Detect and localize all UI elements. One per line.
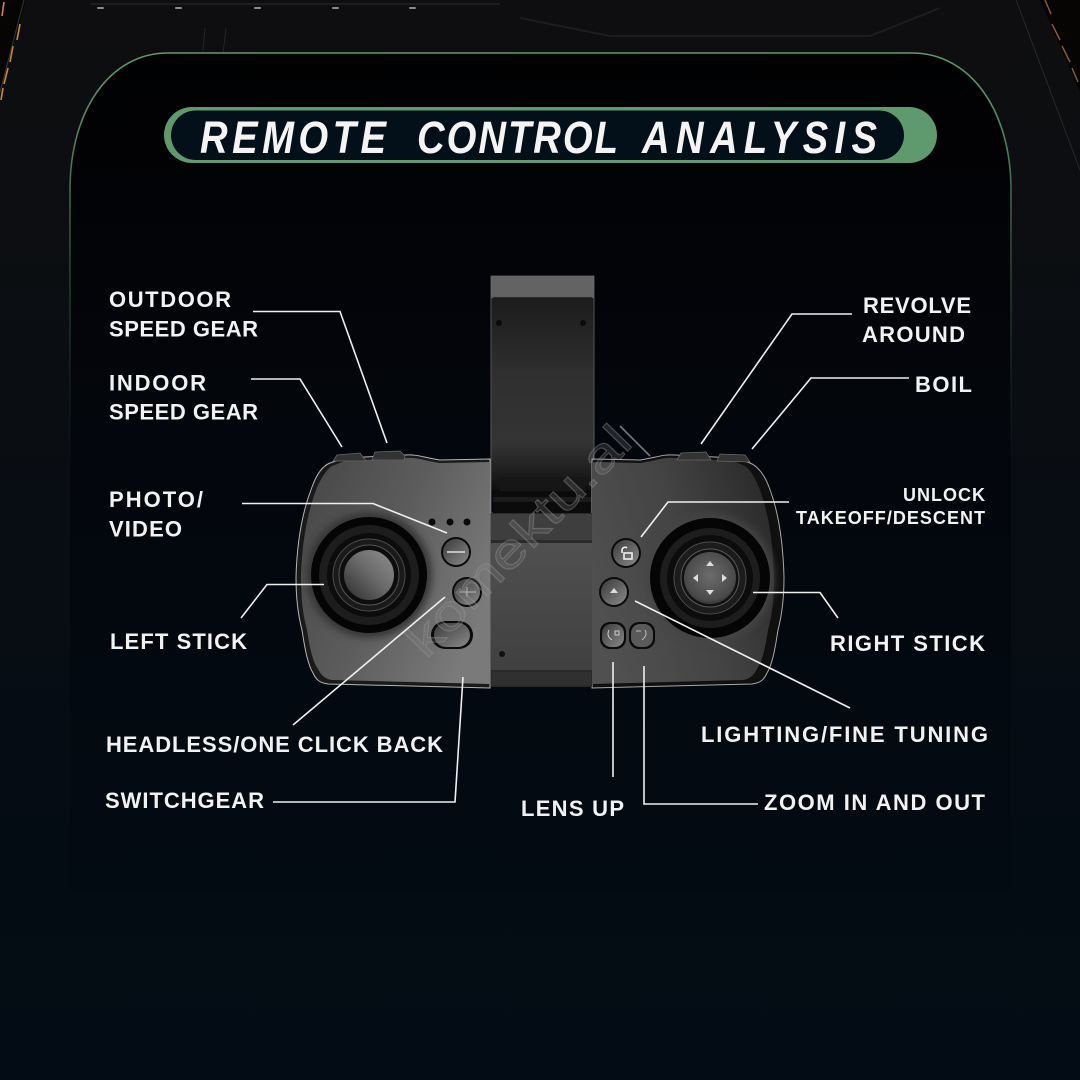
- left joystick: [306, 512, 432, 638]
- label: switchgear: SWITCHGEAR: [105, 788, 264, 813]
- line: boil: [752, 378, 909, 449]
- line: headless: [293, 597, 445, 725]
- label: revolve around: AROUND: [862, 322, 965, 347]
- button: headless one click back: [452, 577, 482, 607]
- label: headless one click back: HEADLESS/ONE CLICK BACK: [106, 732, 443, 757]
- label: unlock takeoff descent: [796, 485, 985, 528]
- left shoulder triggers: [333, 451, 405, 461]
- line: short stray: [620, 426, 650, 456]
- remote controller: [296, 276, 784, 688]
- phone holder: [491, 276, 594, 513]
- label: boil: BOIL: [915, 372, 972, 397]
- indicator lights: [428, 518, 470, 526]
- button: switchgear: [431, 621, 473, 649]
- button: photo video: [441, 537, 471, 567]
- line: switchgear: [273, 677, 463, 802]
- label: zoom in and out: ZOOM IN AND OUT: [764, 790, 986, 815]
- title text: [200, 112, 877, 163]
- label: indoor speed gear: [109, 370, 258, 424]
- label: unlock takeoff descent: UNLOCK: [903, 485, 985, 505]
- label: unlock takeoff descent: TAKEOFF/DESCENT: [796, 508, 985, 528]
- line: right stick: [753, 592, 838, 618]
- label: right stick: RIGHT STICK: [830, 631, 985, 656]
- decorative top machinery: [0, 0, 1080, 170]
- right shoulder triggers: [677, 452, 750, 462]
- label: photo video: VIDEO: [109, 516, 182, 542]
- label: lens up: LENS UP: [521, 796, 624, 821]
- label: photo video: PHOTO/: [109, 487, 203, 512]
- button: unlock: [611, 538, 641, 568]
- right joystick: [646, 514, 774, 642]
- title banner: [164, 107, 937, 163]
- controller left grip: [296, 455, 490, 688]
- button: lens: [600, 622, 626, 649]
- line: indoor speed gear: [251, 379, 342, 447]
- title pill: [164, 107, 937, 163]
- watermark: komektu.al: [396, 415, 642, 668]
- line: lens up: [612, 662, 614, 777]
- line: zoom: [644, 666, 758, 804]
- line: lighting: [635, 601, 850, 708]
- label: photo video: [109, 487, 203, 542]
- title text: CONTROL: [417, 112, 618, 163]
- title text: REMOTE: [200, 112, 387, 163]
- rounded content panel: [70, 53, 1011, 890]
- label: revolve around: REVOLVE: [863, 293, 971, 318]
- centre module: [491, 513, 592, 687]
- line: revolve: [701, 314, 852, 444]
- label: revolve around: [862, 293, 971, 347]
- line: outdoor speed gear: [253, 312, 387, 443]
- label: left stick: LEFT STICK: [110, 629, 247, 654]
- label: lighting fine tuning: LIGHTING/FINE TUNING: [701, 722, 988, 747]
- label: indoor speed gear: INDOOR: [109, 370, 206, 396]
- label: outdoor speed gear: SPEED GEAR: [109, 316, 258, 342]
- label: indoor speed gear: SPEED GEAR: [109, 400, 258, 424]
- title text: ANALYSIS: [641, 112, 877, 163]
- label: outdoor speed gear: [109, 287, 258, 342]
- button: lighting up: [599, 577, 629, 607]
- line: left stick: [241, 584, 324, 618]
- controller right grip: [592, 455, 784, 688]
- label: outdoor speed gear: OUTDOOR: [109, 287, 231, 312]
- line: photo video: [242, 504, 447, 533]
- line: unlock: [641, 502, 789, 537]
- button: zoom: [629, 622, 655, 649]
- leader lines: [241, 312, 909, 804]
